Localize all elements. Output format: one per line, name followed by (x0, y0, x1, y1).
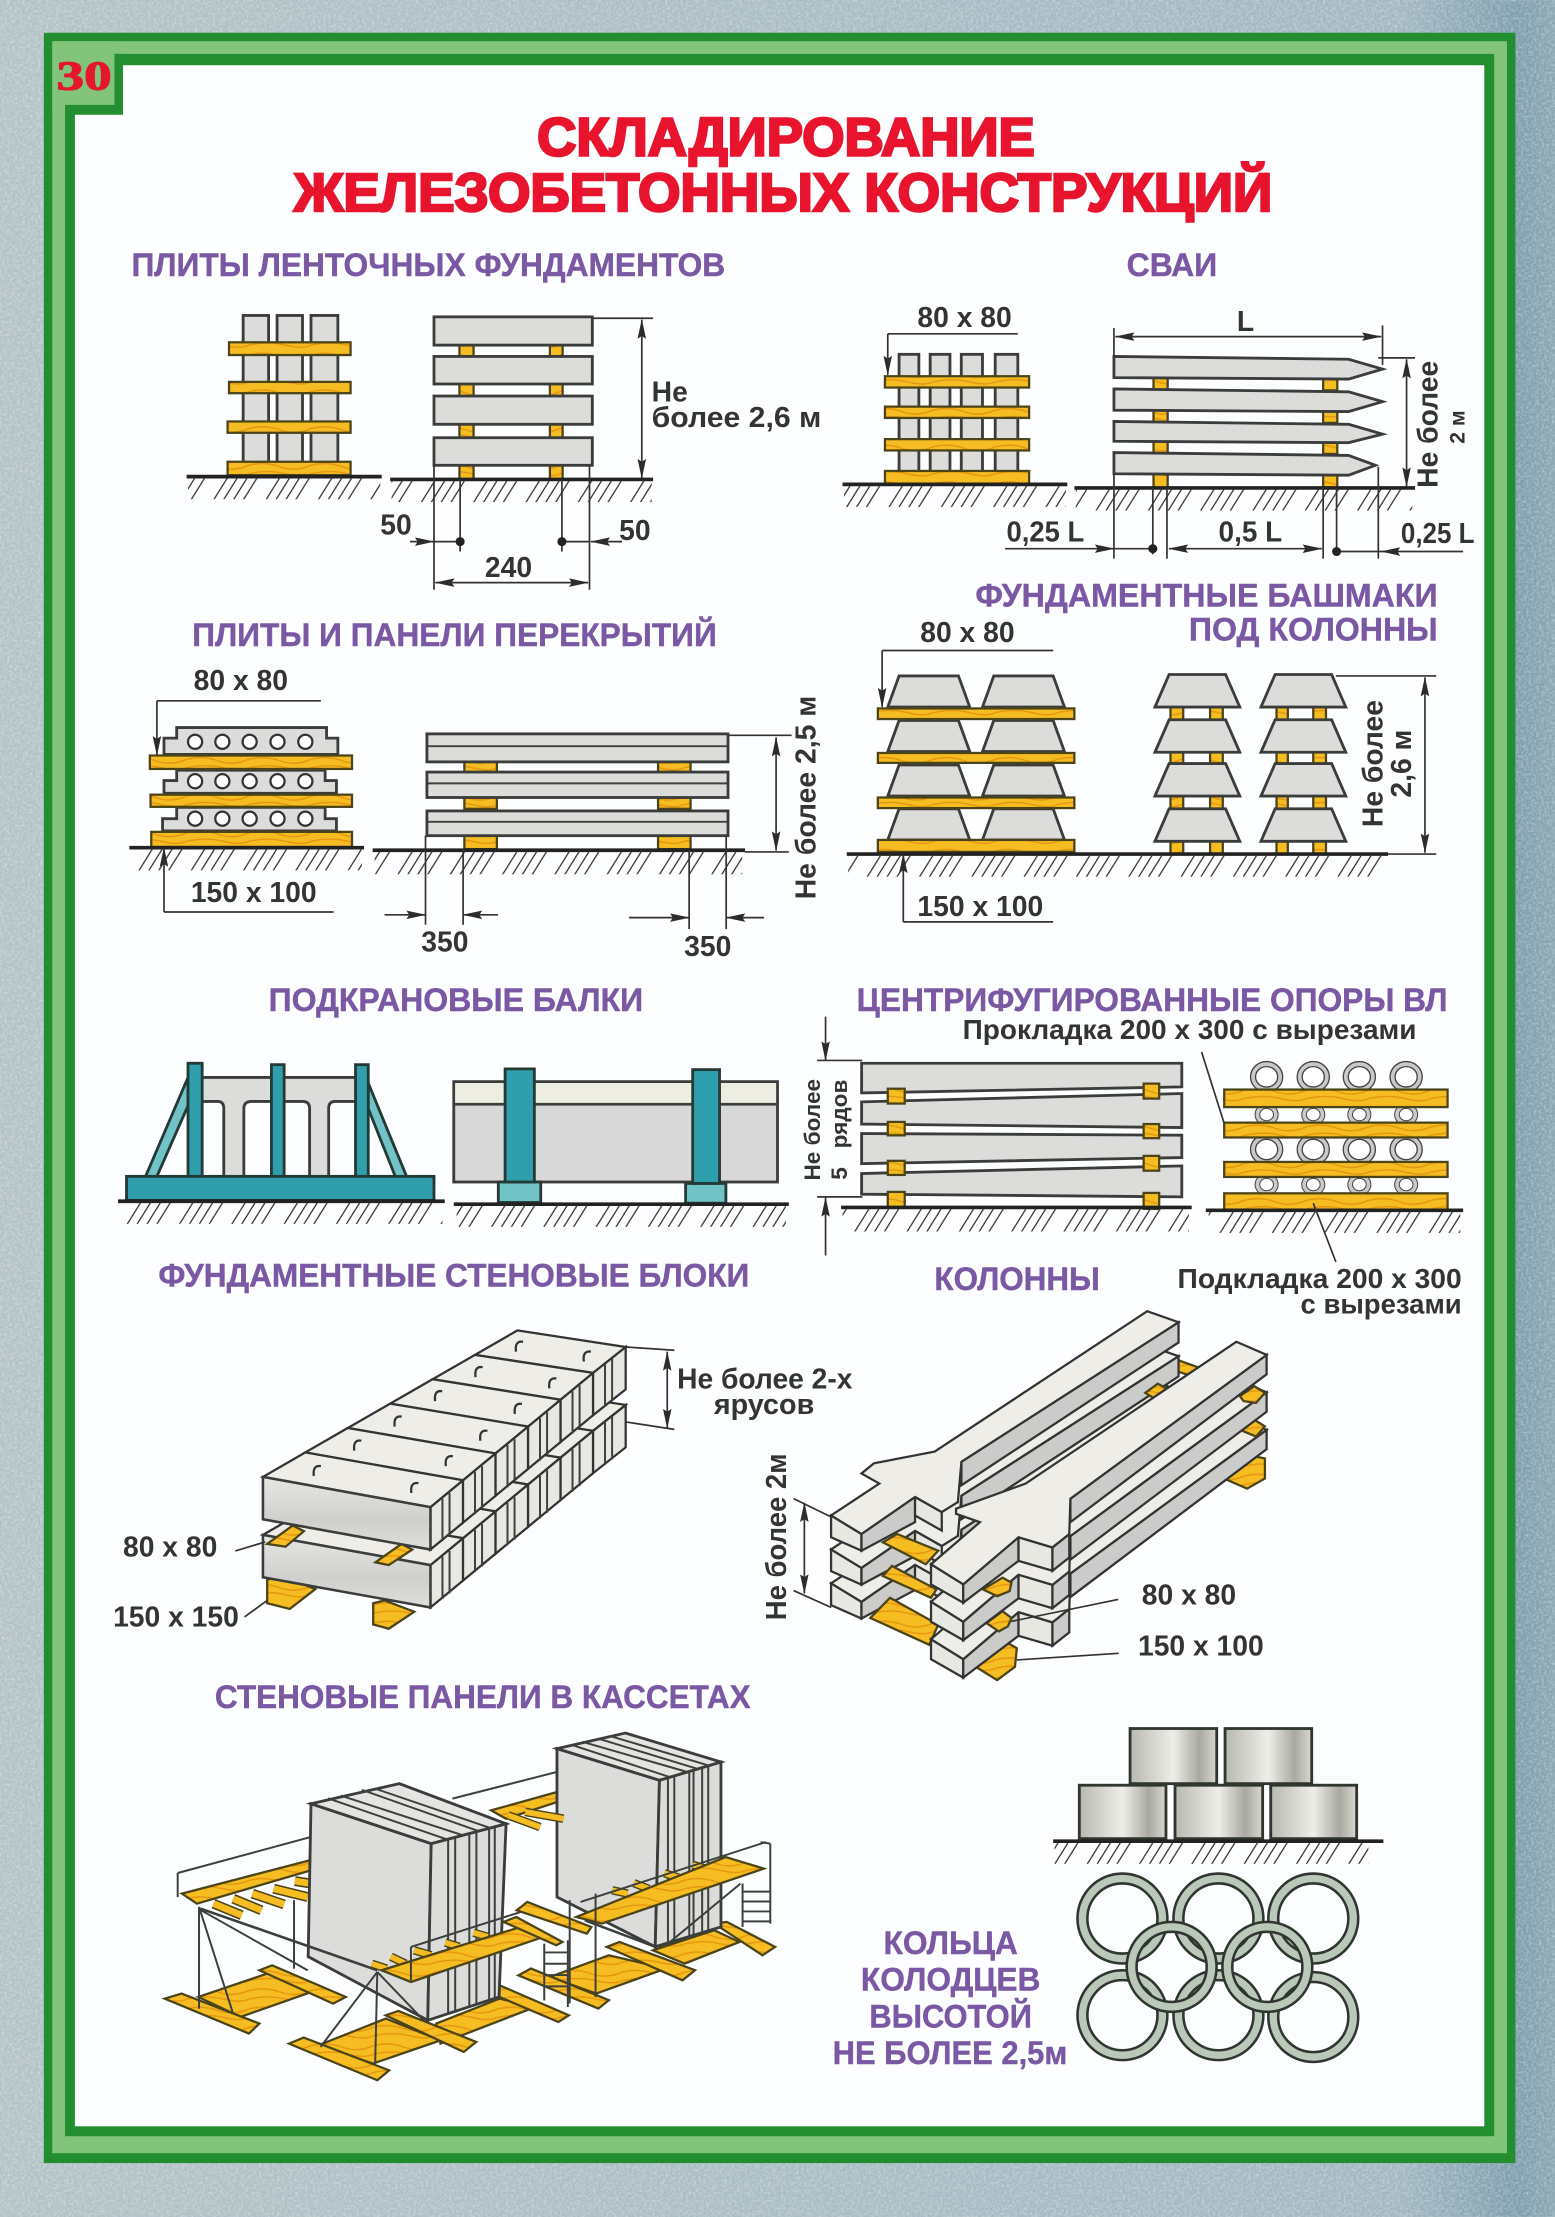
dimensions: 2 м (1447, 410, 1470, 444)
dimensions and labels (800, 1017, 1462, 1319)
dimensions: 350 (684, 930, 731, 962)
side view stack (1074, 356, 1415, 511)
dimensions: ярусов (713, 1388, 814, 1420)
label: КОЛЬЦА (884, 1925, 1018, 1961)
dimensions: 350 (421, 926, 468, 958)
label: НЕ БОЛЕЕ 2,5м (833, 2035, 1067, 2071)
heading: ФУНДАМЕНТНЫЕ БАШМАКИ (975, 578, 1438, 614)
label: КОЛОДЦЕВ (861, 1962, 1040, 1998)
far timbers (1149, 1354, 1265, 1489)
spacer timbers (267, 1526, 412, 1565)
beam side view (454, 1069, 789, 1227)
dimensions: 80 x 80 (917, 301, 1012, 333)
poles side view (841, 1063, 1192, 1231)
dimensions: Не (652, 376, 688, 408)
panel: columns (760, 1261, 1267, 1680)
end view stack (187, 315, 382, 499)
lifting loops (314, 1342, 591, 1493)
hollow core stack (129, 728, 364, 870)
dimensions: 80 x 80 (194, 664, 288, 696)
heading: ПОДКРАНОВЫЕ БАЛКИ (269, 982, 643, 1018)
side view panels (373, 734, 745, 874)
page number: 30 (57, 52, 112, 98)
rings top view (1077, 1874, 1358, 2062)
dimensions (888, 301, 1474, 559)
footings with spacers (847, 675, 1388, 877)
dimensions (882, 616, 1436, 922)
heading: КОЛОННЫ (934, 1261, 1100, 1297)
dimensions: Не более (1357, 700, 1389, 827)
heading: ЦЕНТРИФУГИРОВАННЫЕ ОПОРЫ ВЛ (857, 982, 1448, 1018)
heading: ПЛИТЫ И ПАНЕЛИ ПЕРЕКРЫТИЙ (192, 615, 717, 653)
side view stack (390, 317, 653, 502)
panel: well rings (833, 1729, 1383, 2071)
dimensions: Не более 2м (760, 1453, 792, 1620)
panel: crane beams (118, 982, 789, 1227)
back column stack (831, 1311, 1179, 1645)
dimensions: 80 x 80 (123, 1531, 217, 1563)
front racks (200, 1812, 766, 2064)
dimensions: Не более 2,5 м (790, 696, 822, 899)
panel: floor slabs and panels (129, 615, 822, 962)
panel: strip foundation slabs (131, 247, 821, 590)
dimensions: 0,25 L (1401, 517, 1474, 549)
panel stack right (557, 1733, 721, 1947)
title (293, 108, 1272, 223)
dimensions and labels: Не более (800, 1079, 825, 1181)
rear racks (178, 1772, 557, 2014)
dimensions: 240 (485, 551, 532, 583)
dimensions: 150 x 150 (113, 1601, 239, 1633)
front column stack (931, 1342, 1267, 1680)
dimensions: 150 x 100 (1138, 1630, 1264, 1662)
panel stack left (308, 1784, 506, 2020)
dimensions and labels: 5 рядов (827, 1080, 852, 1180)
dimensions: 2,6 м (1385, 730, 1417, 798)
footings with long boards (878, 676, 1074, 852)
poles end view (1206, 1064, 1463, 1233)
dimensions: 150 x 100 (191, 876, 317, 908)
title: СКЛАДИРОВАНИЕ (537, 108, 1035, 168)
end view stack (843, 354, 1067, 507)
dimensions (380, 318, 821, 590)
dimensions: L (1237, 305, 1254, 337)
heading: ФУНДАМЕНТНЫЕ СТЕНОВЫЕ БЛОКИ (158, 1258, 749, 1294)
heading (975, 578, 1438, 648)
pad label: Прокладка 200 x 300 с вырезами (963, 1014, 1416, 1045)
heading: СТЕНОВЫЕ ПАНЕЛИ В КАССЕТАХ (215, 1679, 751, 1715)
dimensions: 50 (619, 514, 651, 546)
upper tier (263, 1330, 626, 1550)
panel: column footings (847, 578, 1438, 922)
dimensions (760, 1453, 1264, 1662)
dimensions: 80 x 80 (1142, 1579, 1236, 1611)
dimensions: Не более (1412, 361, 1444, 488)
dimensions and labels: Подкладка 200 x 300 (1178, 1263, 1462, 1294)
label (833, 1925, 1067, 2071)
title: ЖЕЛЕЗОБЕТОННЫХ КОНСТРУКЦИЙ (293, 162, 1272, 223)
panel: foundation wall blocks (113, 1258, 853, 1633)
bottom timbers (267, 1578, 414, 1629)
heading: ПОД КОЛОННЫ (1189, 612, 1438, 648)
dimensions (157, 664, 822, 962)
beam end view (118, 1063, 445, 1224)
dimensions: 80 x 80 (920, 616, 1015, 648)
heading: СВАИ (1127, 247, 1217, 283)
ladders (544, 1842, 770, 2007)
panel: wall panels in cassettes (165, 1679, 775, 2080)
dimensions (113, 1347, 853, 1633)
panel: centrifuged power-line poles (800, 982, 1463, 1319)
dimensions: 50 (380, 509, 412, 541)
stacked rings side view (1053, 1729, 1383, 1864)
dimensions: 0,25 L (1007, 516, 1084, 548)
panel: piles (843, 247, 1474, 559)
lower tier (263, 1388, 626, 1608)
label: ВЫСОТОЙ (869, 1996, 1032, 2034)
dimensions: более 2,6 м (652, 401, 821, 433)
dimensions: Не более 2-х (677, 1362, 853, 1394)
dimensions: 0,5 L (1219, 516, 1282, 548)
heading: ПЛИТЫ ЛЕНТОЧНЫХ ФУНДАМЕНТОВ (131, 247, 725, 283)
dimensions: 150 x 100 (917, 890, 1043, 922)
dimensions and labels: с вырезами (1301, 1288, 1462, 1319)
bottom pallets (165, 1922, 775, 2080)
